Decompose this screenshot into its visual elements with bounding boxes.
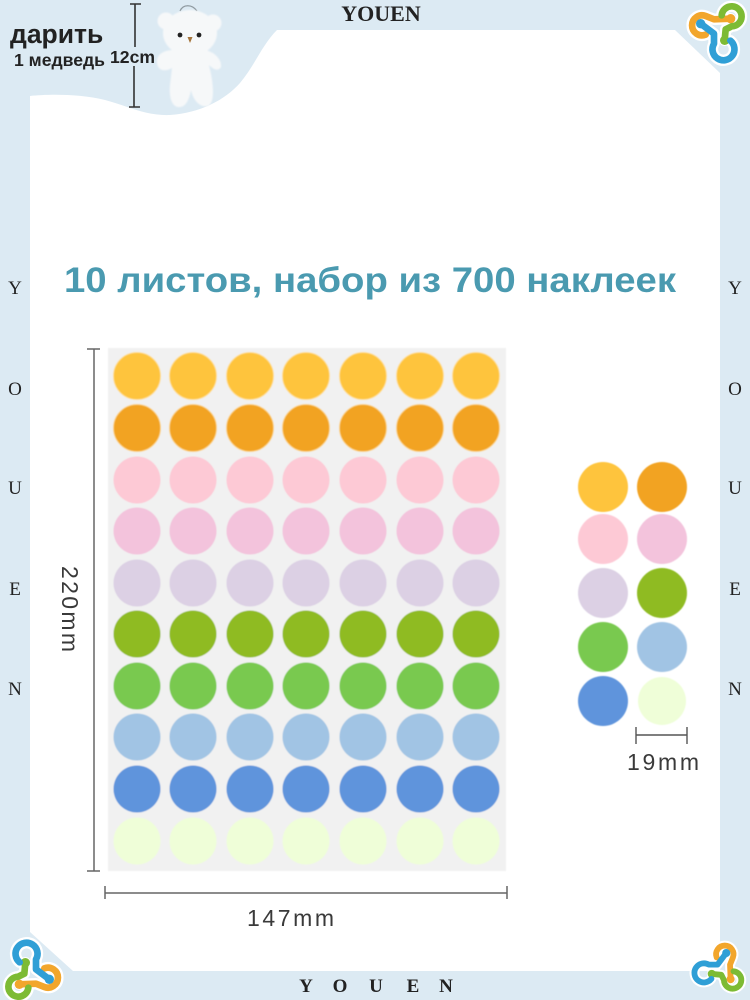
right side brand letters: [728, 278, 742, 700]
left side brand letters: [8, 278, 22, 700]
right side brand letters: U: [728, 478, 742, 499]
bottom brand letters: E: [407, 976, 419, 997]
brand name top: YOUEN: [341, 1, 421, 26]
bottom brand letters: U: [369, 976, 383, 997]
bear height dimension: [110, 4, 155, 107]
row: green: [114, 662, 500, 710]
title: 10 листов, набор из 700 наклеек: [64, 261, 677, 300]
height dimension 220mm: 220mm: [57, 566, 83, 652]
sticker diameter dimension 19mm: 19mm: [627, 749, 699, 775]
row: yellow: [114, 352, 500, 400]
sticker sheet: 7 columns by 10 rows: [108, 348, 506, 871]
row: lilac: [114, 560, 500, 606]
right side brand letters: O: [728, 379, 742, 400]
left side brand letters: N: [8, 679, 22, 700]
row: orchid pink: [114, 508, 500, 554]
right side brand letters: N: [728, 679, 742, 700]
gift subtext: 1 медведь: [14, 50, 105, 70]
sticker diameter dimension 19mm: [627, 727, 699, 775]
left side brand letters: Y: [8, 278, 22, 299]
left side brand letters: O: [8, 379, 22, 400]
height dimension 220mm: [57, 349, 100, 871]
icon: white teddy bear: [157, 6, 222, 107]
icon: logo bottom left: [8, 943, 58, 997]
row: blue: [114, 766, 500, 812]
row: light blue: [114, 714, 500, 760]
right side brand letters: Y: [728, 278, 742, 299]
colour swatches: 10 sticker colours: [578, 462, 687, 726]
bottom brand letters: O: [333, 976, 347, 997]
left side brand letters: U: [8, 478, 22, 499]
row: pink: [114, 456, 500, 504]
row: olive green: [114, 610, 500, 658]
bottom brand letters: N: [439, 976, 453, 997]
icon: logo top right: [692, 6, 742, 60]
icon: logo bottom right: [694, 946, 741, 989]
gift heading: дарить: [10, 19, 103, 49]
row: pale green: [114, 818, 500, 864]
width dimension 147mm: 147mm: [247, 905, 334, 931]
bear height dimension: 12cm: [110, 47, 155, 67]
bottom brand letters: Y: [299, 976, 313, 997]
left side brand letters: E: [9, 579, 21, 600]
row: orange: [114, 404, 500, 452]
width dimension 147mm: [105, 886, 507, 931]
bottom brand letters: [299, 976, 453, 997]
right side brand letters: E: [729, 579, 741, 600]
